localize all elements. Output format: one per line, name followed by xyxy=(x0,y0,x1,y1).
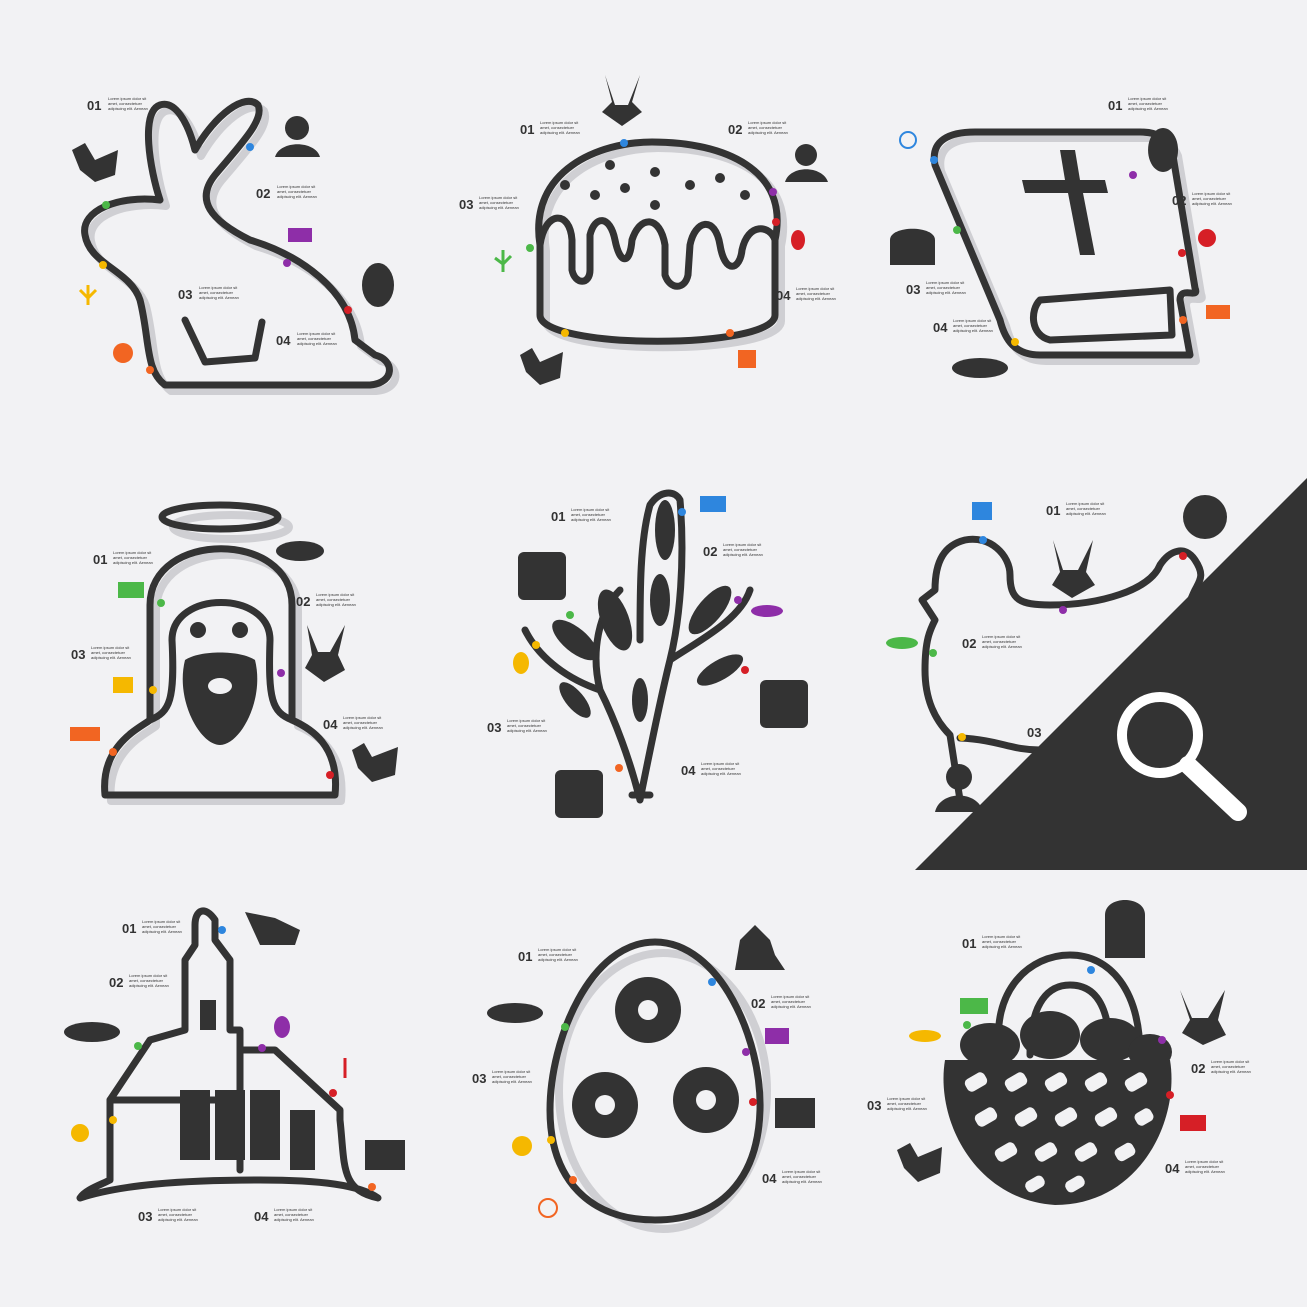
label 02: 02 xyxy=(256,186,270,201)
label 01: 01 xyxy=(1108,98,1122,113)
icon: basket xyxy=(113,343,133,363)
label 04 xyxy=(762,1169,822,1186)
icon: jesus xyxy=(275,116,320,157)
icon: church xyxy=(735,925,785,970)
label 04: 04 xyxy=(933,320,948,335)
icon: church xyxy=(960,998,988,1014)
label 02: 02 xyxy=(751,996,765,1011)
label 01 xyxy=(962,934,1022,951)
icon: paint xyxy=(700,496,726,512)
icon: paint xyxy=(118,582,144,598)
label 01: 01 xyxy=(518,949,532,964)
icon: jesus xyxy=(785,144,828,182)
label 02 xyxy=(256,184,317,201)
label 03: 03 xyxy=(1027,725,1041,740)
icon: rabbit tile xyxy=(518,552,566,600)
label 03: 03 xyxy=(472,1071,486,1086)
icon: basket xyxy=(1183,495,1227,539)
label 03 xyxy=(71,645,131,662)
label 01 xyxy=(1108,96,1168,113)
label 04 xyxy=(933,318,993,335)
label 04 xyxy=(1165,1159,1225,1176)
label 03 xyxy=(138,1207,198,1224)
icon: bread xyxy=(952,358,1008,378)
label 01 xyxy=(87,96,148,113)
icon: hen xyxy=(352,743,398,782)
panel: cake xyxy=(459,75,836,385)
icon: hen xyxy=(897,1143,942,1182)
icon: rabbit xyxy=(245,912,300,945)
icon: jesus tile xyxy=(555,770,603,818)
icon: willow xyxy=(495,250,511,272)
label 03: 03 xyxy=(487,720,501,735)
label 04 xyxy=(254,1207,314,1224)
label 01 xyxy=(93,550,153,567)
label 02 xyxy=(751,994,811,1011)
icon: hen tile xyxy=(760,680,808,728)
icon: jesus xyxy=(935,764,983,812)
icon: rabbit xyxy=(1052,540,1095,598)
icon: egg xyxy=(1148,128,1178,172)
icon: church xyxy=(1206,305,1230,319)
label 03 xyxy=(487,718,547,735)
panel: book xyxy=(890,96,1232,378)
icon: rabbit xyxy=(305,625,345,682)
icon: book xyxy=(365,1140,405,1170)
label 01: 01 xyxy=(93,552,107,567)
icon: jesus tile xyxy=(1105,900,1145,958)
panel: jesus xyxy=(70,505,398,801)
label 01: 01 xyxy=(122,921,136,936)
label 01: 01 xyxy=(551,509,565,524)
icon: rabbit xyxy=(602,75,642,126)
label 02: 02 xyxy=(1191,1061,1205,1076)
icon: chick xyxy=(71,1124,89,1142)
icon: basket xyxy=(1198,229,1216,247)
label 03: 03 xyxy=(138,1209,152,1224)
label 01: 01 xyxy=(520,122,534,137)
icon: book xyxy=(775,1098,815,1128)
label 02: 02 xyxy=(109,975,123,990)
icon: book xyxy=(972,502,992,520)
label 01 xyxy=(1046,501,1106,518)
label 02 xyxy=(728,120,788,137)
label 03: 03 xyxy=(906,282,920,297)
label 01 xyxy=(520,120,580,137)
label 04: 04 xyxy=(323,717,338,732)
icon: bread xyxy=(487,1003,543,1023)
icon: egg xyxy=(791,230,805,250)
panel: hen xyxy=(886,478,1307,870)
icon: paint xyxy=(288,228,312,242)
label 03: 03 xyxy=(71,647,85,662)
icon: basket xyxy=(512,1136,532,1156)
icon: egg xyxy=(513,652,529,674)
label 02: 02 xyxy=(728,122,742,137)
label 01 xyxy=(518,947,578,964)
label 04: 04 xyxy=(776,288,791,303)
label 02 xyxy=(109,973,169,990)
label 04: 04 xyxy=(254,1209,269,1224)
icon: cake xyxy=(890,229,935,265)
panel: church xyxy=(64,911,405,1224)
panel: willow xyxy=(487,493,808,818)
label 03 xyxy=(472,1069,532,1086)
label 02: 02 xyxy=(962,636,976,651)
label 02 xyxy=(1191,1059,1251,1076)
label 01: 01 xyxy=(1046,503,1060,518)
label 04 xyxy=(323,715,383,732)
label 02 xyxy=(962,634,1022,651)
icon: egg xyxy=(274,1016,290,1038)
icon: book xyxy=(738,350,756,368)
icon: rabbit xyxy=(539,1199,557,1217)
label 03: 03 xyxy=(459,197,473,212)
label 03 xyxy=(867,1096,927,1113)
icon: book xyxy=(113,677,133,693)
label 04 xyxy=(776,286,836,303)
icon: hen xyxy=(72,143,118,182)
label 03 xyxy=(459,195,519,212)
label 01 xyxy=(122,919,182,936)
label 02 xyxy=(1172,191,1232,208)
label 02 xyxy=(296,592,356,609)
icon: church xyxy=(70,727,100,741)
icon: bread xyxy=(64,1022,120,1042)
panel: egg xyxy=(472,925,822,1229)
label 02: 02 xyxy=(296,594,310,609)
label 02 xyxy=(703,542,763,559)
icon: bread xyxy=(886,637,918,649)
label 04 xyxy=(276,331,337,348)
label 01: 01 xyxy=(962,936,976,951)
label 03 xyxy=(178,285,239,302)
icon: hen xyxy=(520,348,563,385)
label 01: 01 xyxy=(87,98,101,113)
label 03: 03 xyxy=(867,1098,881,1113)
label 03: 03 xyxy=(178,287,192,302)
label 02: 02 xyxy=(703,544,717,559)
label 01 xyxy=(551,507,611,524)
triangle banner with magnifier xyxy=(915,478,1307,870)
label 02: 02 xyxy=(1172,193,1186,208)
label 04: 04 xyxy=(681,763,696,778)
icon: jesus blue xyxy=(900,132,916,148)
label 04: 04 xyxy=(762,1171,777,1186)
icon: bread xyxy=(751,605,783,617)
icon: willow xyxy=(344,1058,346,1078)
icon: bread xyxy=(909,1030,941,1042)
icon: bread xyxy=(276,541,324,561)
label 03 xyxy=(906,280,966,297)
icon: rabbit xyxy=(1180,990,1226,1045)
icon: paint xyxy=(1180,1115,1206,1131)
label 04 xyxy=(681,761,741,778)
label 04: 04 xyxy=(276,333,291,348)
label 04: 04 xyxy=(1165,1161,1180,1176)
icon: willow xyxy=(80,285,96,305)
icon: paint xyxy=(765,1028,789,1044)
panel: rabbit xyxy=(72,96,395,391)
panel: basket xyxy=(867,900,1251,1205)
icon: egg xyxy=(362,263,394,307)
